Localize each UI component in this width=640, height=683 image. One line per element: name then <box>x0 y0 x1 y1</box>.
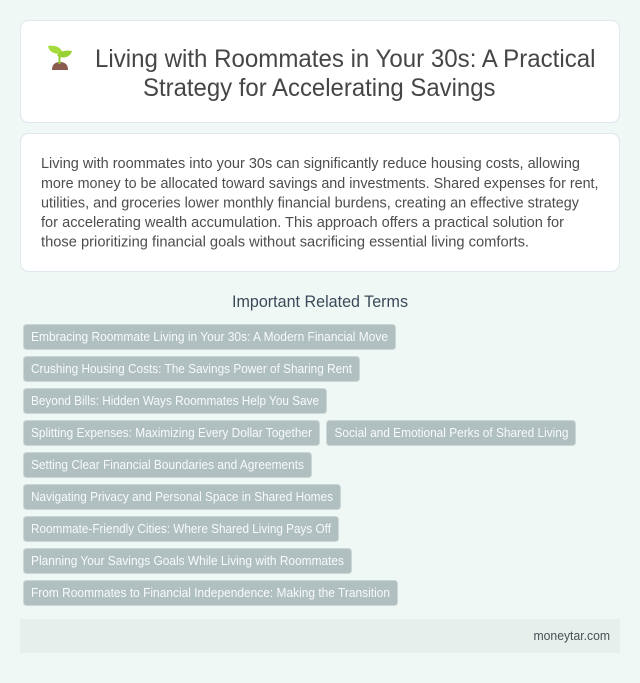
text block: summary paragraph: more money to be allocated toward savings and investments. Shared expenses for rent, <box>41 175 598 192</box>
tag 4 <box>24 420 320 446</box>
tag 8 <box>24 516 338 542</box>
tag 2: Crushing Housing Costs: The Savings Power of Sharing Rent <box>31 361 352 376</box>
text block: summary paragraph: for accelerating wealth accumulation. This approach offers a practical solution for <box>41 214 564 231</box>
heading: important related terms: Important Related Terms <box>232 293 408 311</box>
tag 7: Navigating Privacy and Personal Space in Shared Homes <box>31 489 333 504</box>
tag 2 <box>24 356 360 382</box>
panel: summary card <box>20 134 620 272</box>
tag 5 <box>326 420 576 446</box>
tag 3: Beyond Bills: Hidden Ways Roommates Help You Save <box>31 393 319 408</box>
text block: summary paragraph: those prioritizing financial goals without sacrificing essential living comforts. <box>41 234 529 251</box>
panel: title card <box>20 20 620 122</box>
tag 3 <box>24 388 326 414</box>
tag 5: Social and Emotional Perks of Shared Living <box>334 425 568 440</box>
tag 8: Roommate-Friendly Cities: Where Shared Living Pays Off <box>31 521 331 536</box>
footer bar <box>20 619 620 653</box>
heading: title: Strategy for Accelerating Savings <box>143 74 496 102</box>
tag 10 <box>24 580 398 606</box>
tag 1 <box>24 324 396 350</box>
tag 9 <box>24 548 352 574</box>
text block: summary paragraph: Living with roommates into your 30s can significantly reduce housing costs, allowing <box>41 155 580 172</box>
heading: title: Living with Roommates in Your 30s: A Practical <box>95 45 596 73</box>
tag 6: Setting Clear Financial Boundaries and Agreements <box>31 457 304 472</box>
tag 9: Planning Your Savings Goals While Living with Roommates <box>31 553 344 568</box>
heading: title <box>95 45 596 102</box>
text block: summary paragraph: utilities, and groceries lower monthly financial burdens, creating an effective strategy <box>41 194 579 211</box>
tag 1: Embracing Roommate Living in Your 30s: A Modern Financial Move <box>31 329 388 344</box>
text block: summary paragraph <box>41 155 598 251</box>
tag 4: Splitting Expenses: Maximizing Every Dollar Together <box>31 425 313 440</box>
footer source text: moneytar.com <box>534 629 610 643</box>
tag 10: From Roommates to Financial Independence: Making the Transition <box>31 585 390 600</box>
tag 6 <box>24 452 312 478</box>
list: related term tags <box>24 324 576 606</box>
tag 7 <box>24 484 340 510</box>
icon: sprout <box>48 46 72 70</box>
